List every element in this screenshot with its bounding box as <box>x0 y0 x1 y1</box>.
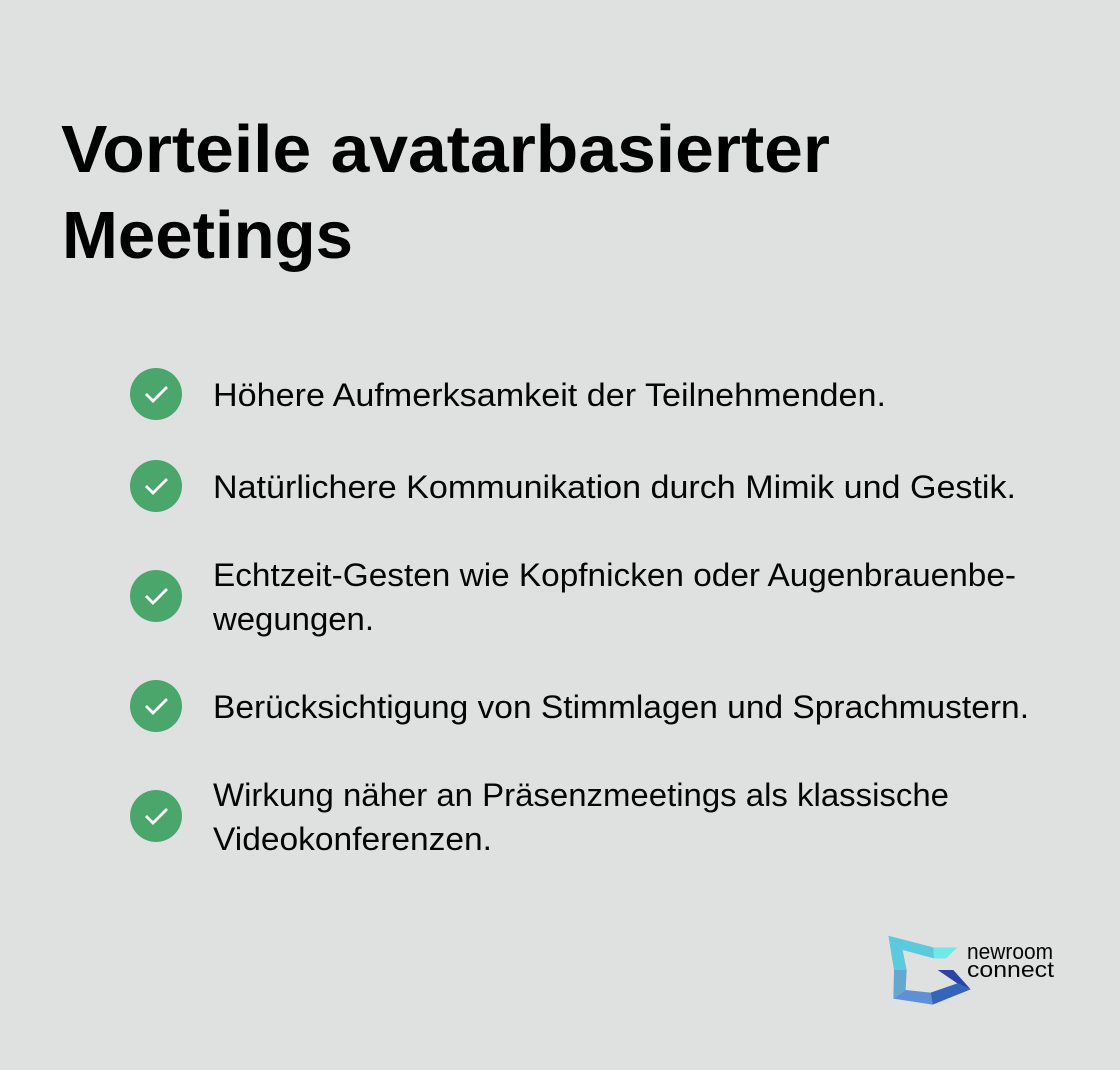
text 5 <box>213 777 949 857</box>
list item 1 <box>130 368 886 420</box>
icon: check 5 <box>130 790 182 842</box>
icon: check 1 <box>130 368 182 420</box>
logo wordmark: connect <box>967 957 1054 982</box>
icon: check 2 <box>130 460 182 512</box>
icon: check 4 <box>130 680 182 732</box>
title: Vorteile avatarbasierter <box>61 112 830 187</box>
text 3 <box>212 557 1016 637</box>
logo: newroom connect <box>888 936 1054 1005</box>
list item 2 <box>130 460 1016 512</box>
icon: logo mark <box>888 936 971 1005</box>
text 2: Natürlichere Kommunikation durch Mimik und Gestik. <box>213 469 1016 505</box>
list item 4 <box>130 680 1029 732</box>
text 1: Höhere Aufmerksamkeit der Teilnehmenden. <box>213 377 886 413</box>
list item 5 <box>130 777 949 857</box>
text 5: Videokonferenzen. <box>213 821 492 857</box>
text 4: Berücksichtigung von Stimmlagen und Sprachmustern. <box>213 689 1029 725</box>
logo wordmark: newroom <box>967 939 1053 964</box>
icon: check 3 <box>130 570 182 622</box>
text 3: wegungen. <box>212 601 374 637</box>
title <box>61 112 830 273</box>
logo wordmark <box>967 939 1054 982</box>
text 3: Echtzeit-Gesten wie Kopfnicken oder Augenbrauenbe- <box>213 557 1016 593</box>
list item 3 <box>130 557 1016 637</box>
text 5: Wirkung näher an Präsenzmeetings als klassische <box>213 777 949 813</box>
title: Meetings <box>62 198 353 273</box>
